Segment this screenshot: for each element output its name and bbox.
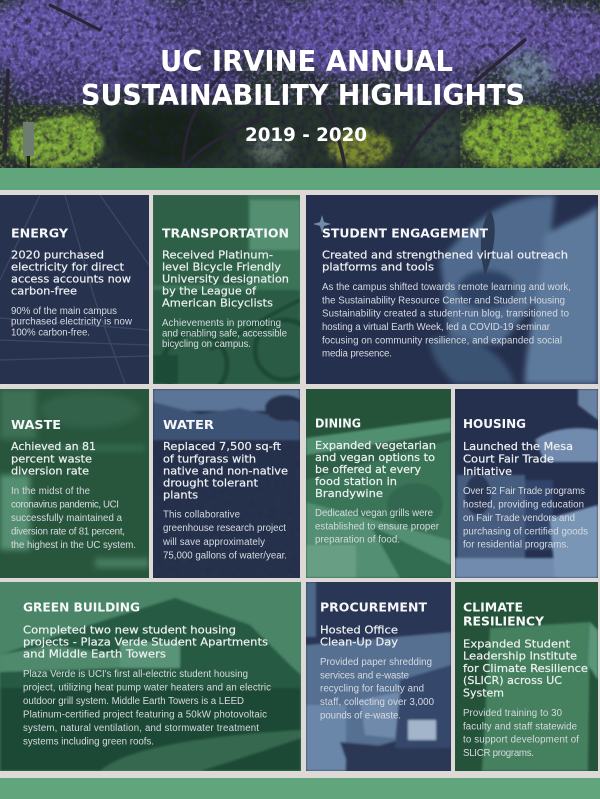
body text: project, utilizing heat pump water heaters and an electric — [23, 683, 271, 694]
headline text: food station in — [315, 475, 397, 488]
headline text: diversion rate — [11, 464, 89, 477]
headline text: and vegan options to — [315, 451, 435, 464]
body text: purchasing of certified goods — [463, 526, 588, 537]
body text: purchased electricity is now — [11, 317, 133, 328]
body text: established to ensure proper — [315, 521, 440, 532]
panel: climate resiliency — [455, 582, 598, 771]
heading: PROCUREMENT — [320, 600, 427, 615]
body text: will save approximately — [162, 537, 265, 548]
header photo — [0, 0, 600, 168]
headline text: Brandywine — [315, 487, 383, 500]
headline text — [163, 440, 288, 502]
headline text: by the League of — [162, 285, 257, 298]
body text: preparation of food. — [315, 535, 400, 546]
headline text: University designation — [162, 273, 289, 286]
body text: media presence. — [322, 349, 392, 360]
heading: WATER — [163, 417, 214, 432]
headline text: projects - Plaza Verde Student Apartments — [23, 636, 268, 649]
headline text — [320, 623, 399, 649]
body text — [11, 486, 136, 551]
headline text: electricity for direct — [11, 260, 125, 273]
body text: recycling for faculty and — [320, 684, 424, 695]
body text: focusing on community resilience, and expanded social — [322, 335, 562, 346]
body text — [23, 669, 271, 748]
heading: WASTE — [11, 417, 61, 432]
body text: Provided training to 30 — [463, 708, 563, 719]
body text: hosted, providing education — [463, 499, 584, 510]
headline text: carbon-free — [11, 285, 77, 298]
body text — [315, 508, 440, 546]
body text — [162, 510, 287, 561]
body text: In the midst of the — [11, 486, 90, 497]
panel: transportation — [153, 195, 300, 384]
header: jacaranda tree photo with title — [0, 0, 600, 168]
headline text: Completed two new student housing — [23, 623, 236, 636]
headline text: access accounts now — [11, 273, 131, 286]
body text: This collaborative — [163, 510, 240, 521]
headline text: (SLICR) across UC — [463, 674, 562, 687]
headline text: and Middle Earth Towers — [23, 647, 166, 660]
headline text: Created and strengthened virtual outreach — [322, 248, 568, 261]
headline text: for Climate Resilience — [463, 662, 588, 675]
body text: 100% carbon-free. — [11, 327, 90, 338]
body text: successfully maintained a — [11, 513, 123, 524]
body text: and enabling safe, accessible — [162, 329, 287, 340]
headline text — [11, 248, 131, 298]
headline text: plants — [163, 489, 198, 502]
headline text: Hosted Office — [320, 623, 398, 636]
body text: systems including green roofs. — [23, 737, 154, 748]
body text — [463, 708, 579, 759]
headline text: of turfgrass with — [163, 452, 256, 465]
headline text: Expanded Student — [463, 637, 571, 650]
top green band — [0, 168, 600, 190]
headline text — [463, 637, 588, 699]
panel: waste — [0, 389, 149, 578]
headline text: System — [463, 686, 504, 699]
body text: services and e-waste — [320, 670, 409, 681]
body text — [463, 486, 588, 551]
headline text: platforms and tools — [322, 260, 434, 273]
headline text — [315, 439, 436, 500]
body text — [320, 657, 435, 721]
heading: DINING — [315, 416, 361, 431]
body text: for residential programs. — [463, 540, 569, 551]
body text: 75,000 gallons of water/year. — [163, 550, 287, 561]
subtitle: year range: 2019 - 2020 — [245, 124, 367, 146]
heading: GREEN BUILDING — [23, 600, 140, 615]
body text: 90% of the main campus — [11, 306, 117, 317]
headline text: Leadership Institute — [463, 649, 577, 662]
heading: HOUSING — [463, 416, 526, 431]
bottom green band — [0, 778, 600, 799]
body text: outdoor grill system. Middle Earth Towers is a LEED — [23, 696, 244, 707]
headline text: Clean-Up Day — [320, 636, 399, 649]
title: SUSTAINABILITY HIGHLIGHTS — [81, 79, 525, 112]
headline text: Expanded vegetarian — [315, 439, 436, 452]
body text: the Sustainability Resource Center and Student Housing — [322, 295, 565, 306]
headline text: Achieved an 81 — [11, 440, 96, 453]
headline text: level Bicycle Friendly — [162, 260, 282, 273]
headline text: Replaced 7,500 sq-ft — [163, 440, 282, 453]
body text: Plaza Verde is UCI's first all-electric student housing — [23, 669, 248, 680]
body text: the highest in the UC system. — [11, 540, 136, 551]
headline text: Received Platinum- — [162, 248, 273, 261]
body text: on Fair Trade vendors and — [463, 513, 575, 524]
panel: procurement — [306, 582, 451, 771]
headline text: Launched the Mesa — [463, 440, 573, 453]
body text: SLICR programs. — [463, 748, 534, 759]
body text: diversion rate of 81 percent, — [11, 527, 125, 538]
body text: pounds of e-waste. — [320, 710, 401, 721]
body text: hosting a virtual Earth Week, led a COVID-19 seminar — [322, 322, 551, 333]
body text: Achievements in promoting — [162, 318, 281, 329]
body text: greenhouse research project — [163, 523, 286, 534]
body text — [322, 282, 571, 360]
heading — [463, 600, 545, 629]
body text: faculty and staff statewide — [463, 721, 577, 732]
heading: TRANSPORTATION — [162, 225, 289, 240]
heading: STUDENT ENGAGEMENT — [322, 225, 488, 240]
body text: to support development of — [463, 735, 579, 746]
headline text: be offered at every — [315, 463, 421, 476]
panel: student engagement — [306, 195, 598, 384]
headline text: American Bicyclists — [162, 297, 273, 310]
heading: CLIMATE — [463, 600, 523, 615]
panel: energy — [0, 195, 149, 384]
panel: water — [153, 389, 305, 578]
heading: ENERGY — [11, 225, 69, 240]
body text: Over 52 Fair Trade programs — [463, 486, 585, 497]
body text: Platinum-certified project featuring a 50kW photovoltaic — [23, 709, 267, 720]
body text: system, natural ventilation, and stormwater treatment — [23, 723, 259, 734]
headline text: Court Fair Trade — [463, 452, 554, 465]
body text: coronavirus pandemic, UCI — [11, 499, 119, 510]
headline text: Initiative — [463, 465, 512, 478]
body text: As the campus shifted towards remote learning and work, — [322, 282, 571, 293]
headline text — [11, 440, 96, 477]
title: UC IRVINE ANNUAL — [160, 45, 453, 78]
panel: housing — [455, 389, 598, 578]
headline text: percent waste — [11, 452, 92, 465]
title — [81, 45, 525, 112]
panel: green building — [0, 582, 301, 771]
headline text — [23, 623, 268, 660]
body text: bicycling on campus. — [162, 339, 251, 350]
body text: Dedicated vegan grills were — [315, 508, 433, 519]
headline text: 2020 purchased — [11, 248, 104, 261]
heading: RESILIENCY — [463, 614, 545, 629]
body text: Provided paper shredding — [320, 657, 432, 668]
headline text — [463, 440, 573, 478]
headline text: drought tolerant — [163, 477, 259, 490]
panel: dining — [306, 389, 451, 578]
body text — [11, 306, 133, 338]
headline text — [322, 248, 568, 273]
headline text — [162, 248, 289, 310]
body text — [162, 318, 287, 350]
body text: staff, collecting over 3,000 — [320, 697, 435, 708]
body text: Sustainability created a student-run blog, transitioned to — [322, 309, 569, 320]
headline text: native and non-native — [163, 464, 288, 477]
